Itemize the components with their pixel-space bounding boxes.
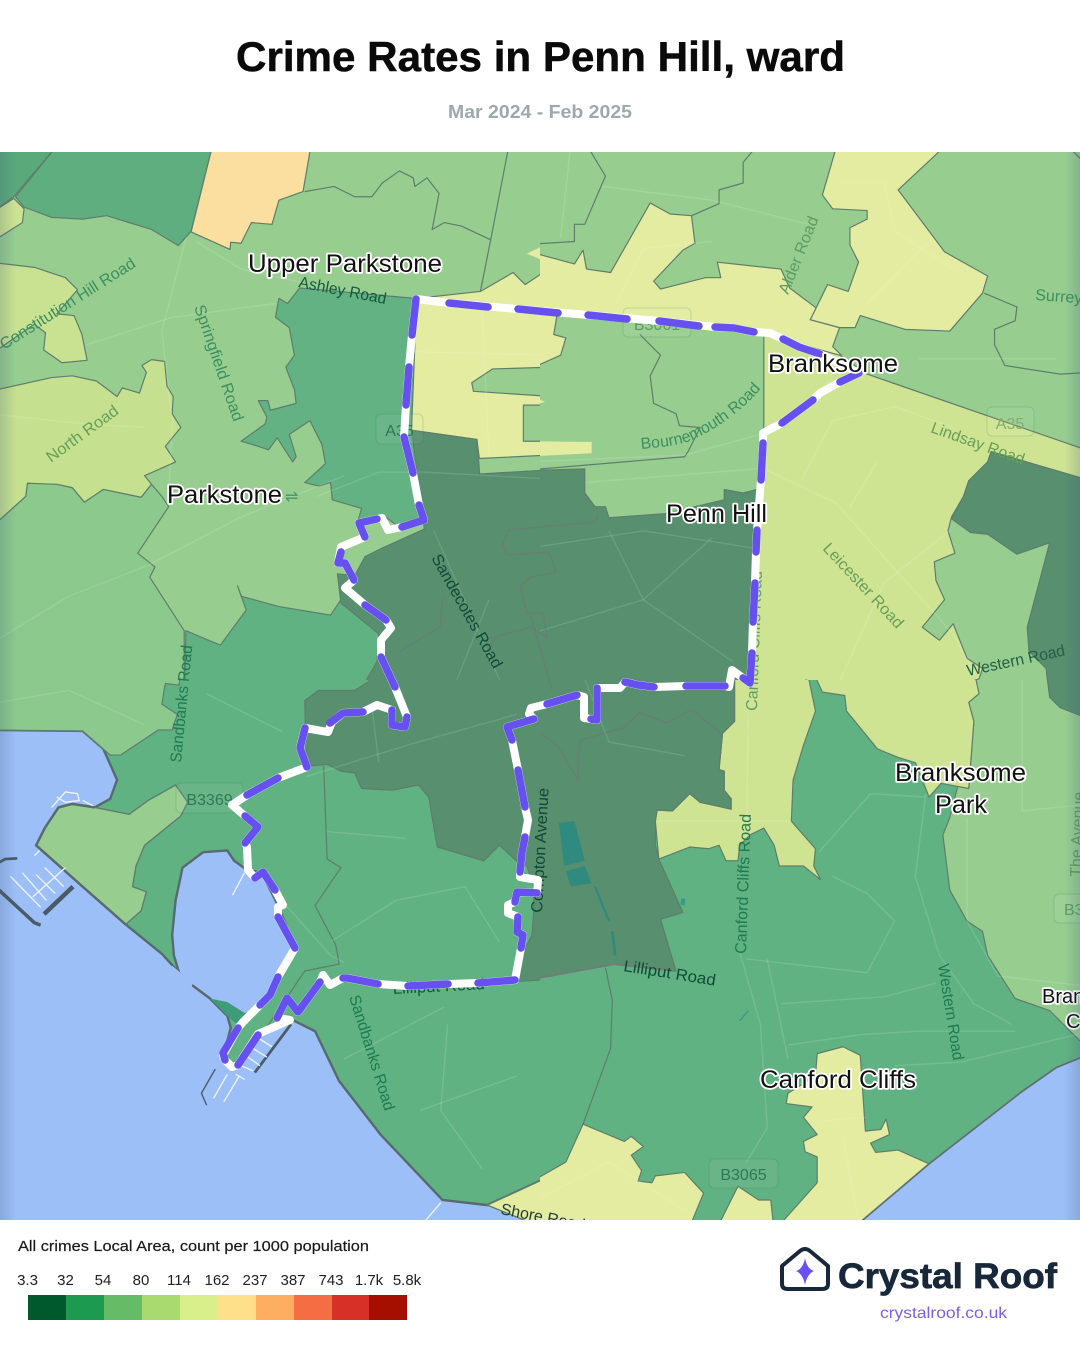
road labels: Constitution Hill Road	[0, 255, 139, 353]
road labels: North Road	[43, 403, 122, 466]
place labels: Branksome	[895, 759, 1026, 787]
title: Crime Rates in Penn Hill, ward	[236, 33, 845, 80]
legend colour swatches	[28, 1295, 407, 1320]
place labels: Canford Cliffs	[760, 1066, 916, 1094]
road labels: Shore Road	[499, 1201, 586, 1234]
map region: north east	[530, 142, 1080, 703]
road labels: Sandecotes Road	[428, 552, 505, 671]
road number shields	[176, 308, 1080, 1188]
road labels: Lilliput Road	[622, 958, 717, 989]
road labels: Leicester Road	[819, 540, 907, 632]
place labels: Upper Parkstone	[248, 250, 442, 278]
icon: house with star	[782, 1249, 828, 1289]
road labels: Alder Road	[776, 214, 822, 296]
logo url: crystalroof.co.uk	[880, 1305, 1008, 1322]
place labels: ⇌	[285, 489, 298, 506]
legend scale values	[17, 1272, 422, 1289]
legend scale values: 114	[167, 1272, 191, 1289]
road labels: Western Road	[934, 963, 966, 1061]
map edge shading	[0, 152, 1080, 1220]
place labels: Parkstone	[167, 481, 282, 509]
road number shields: A35	[996, 416, 1024, 433]
road labels: Sandbanks Road	[345, 993, 397, 1113]
road labels: Western Road	[965, 642, 1067, 680]
legend scale values: 1.7k	[355, 1272, 384, 1289]
road labels: Sandbanks Road	[168, 644, 196, 763]
place labels: Park	[935, 791, 988, 819]
place labels	[167, 250, 1080, 1094]
road labels: Compton Avenue	[529, 787, 553, 913]
road number shields: B3061	[634, 317, 680, 334]
road labels: Canford Cliffs Road	[744, 571, 766, 711]
legend scale values: 3.3	[17, 1272, 38, 1289]
road number shields: A35	[385, 423, 414, 440]
legend scale values: 743	[318, 1272, 344, 1289]
road number shields: B3369	[186, 792, 233, 809]
logo: Crystal Roof	[782, 1249, 1057, 1322]
map region: south west with harbour	[0, 670, 551, 1231]
map region: north west	[0, 142, 551, 703]
road labels: Springfield Road	[190, 303, 246, 424]
road labels	[0, 216, 1080, 1271]
map region: south east	[530, 670, 1080, 1231]
sub-ward boundary lines inside dark area	[399, 515, 598, 690]
legend scale values: 5.8k	[393, 1272, 422, 1289]
legend	[17, 1238, 422, 1320]
road number shields: B3065	[720, 1167, 767, 1184]
legend scale values: 80	[133, 1272, 149, 1289]
road labels: Canford Cliffs Road	[733, 814, 755, 954]
legend scale values: 54	[95, 1272, 111, 1289]
road labels: Ashley Road	[297, 274, 388, 308]
road labels: Lilliput Road	[392, 976, 485, 998]
legend scale values: 162	[204, 1272, 230, 1289]
legend scale values: 237	[242, 1272, 268, 1289]
logo wordmark: Crystal Roof	[838, 1257, 1057, 1296]
place labels: Branksome	[768, 350, 898, 378]
south pier	[201, 1024, 291, 1105]
legend scale values: 387	[280, 1272, 306, 1289]
west marina pontoons	[0, 792, 441, 1231]
legend scale values: 32	[57, 1272, 74, 1289]
road labels: Lindsay Road	[929, 420, 1027, 468]
legend title: All crimes Local Area, count per 1000 population	[18, 1238, 369, 1255]
subtitle: date range: Mar 2024 - Feb 2025	[448, 102, 632, 122]
ward boundary: Penn Hill dashed route	[223, 299, 859, 1067]
road labels: Bournemouth Road	[642, 382, 760, 449]
place labels: Penn Hill	[666, 500, 767, 528]
